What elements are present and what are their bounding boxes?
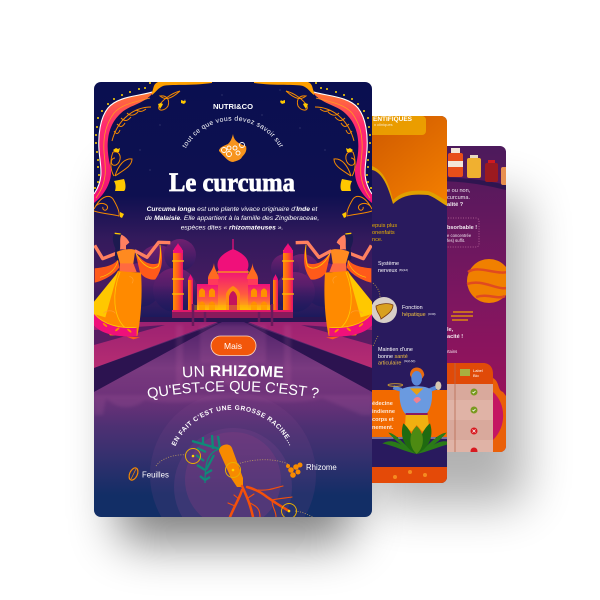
ground	[94, 317, 372, 392]
rhizome diagram	[128, 405, 336, 517]
text: joints: bonne santé	[378, 354, 408, 360]
intro text: Curcuma longa est une plante vivace originaire d'Inde et	[147, 206, 319, 213]
text: benefits intro	[372, 223, 397, 241]
intro text: de Malaisie. Elle appartient à la famille des Zingiberaceae,	[145, 215, 319, 222]
illustration: right dancer	[296, 233, 372, 339]
arches	[226, 286, 240, 310]
panel: middle card: ENTIFIQUES	[373, 116, 413, 123]
icon: planet	[466, 259, 506, 303]
text: nervous system: (8)(12)	[399, 268, 408, 272]
orange band	[372, 390, 447, 437]
table: Label	[473, 368, 483, 373]
text: nervous system: Système	[378, 261, 399, 267]
panel: front card	[94, 82, 372, 517]
icon: turmeric drop	[219, 134, 246, 162]
button: Mais	[211, 336, 256, 356]
intro text: espèces dites « rhizomateuses ».	[181, 224, 283, 232]
panel: middle card: x cliniques	[374, 122, 393, 127]
icon: liver	[371, 297, 397, 323]
panel: middle card: édecine	[372, 401, 393, 407]
illustration: Taj Mahal	[172, 239, 294, 318]
icon: rhizome	[286, 462, 302, 478]
text: joints: (G)(U)(I)	[404, 359, 415, 363]
text fragments: fes) suffit.	[447, 238, 465, 243]
text fragments: bsorbable !	[447, 225, 477, 231]
panel: middle card: indienne	[372, 409, 395, 415]
domes	[218, 249, 248, 271]
text: benefits intro: epuis plus	[372, 223, 397, 229]
text fragments: alité ?	[447, 202, 464, 208]
text: benefits intro: onenfaits	[372, 230, 395, 236]
icon: leaf	[127, 467, 140, 481]
text: liver function: hépatique	[402, 312, 426, 318]
shelf with jars	[447, 148, 506, 190]
text: joints: Maintien d'une	[378, 347, 413, 353]
table	[447, 363, 493, 454]
leaves	[192, 435, 220, 483]
heading: UN RHIZOME	[183, 365, 283, 378]
ornamental frame left	[94, 82, 212, 218]
illustration: left dancer	[94, 233, 170, 339]
monument reflection	[94, 325, 372, 415]
panel: middle card	[372, 116, 447, 483]
minarets	[173, 250, 293, 310]
text fragments: curcuma.	[447, 195, 470, 201]
posts	[193, 304, 272, 326]
arc subtitle: tout ce que vous devez savoir sur	[182, 116, 284, 148]
text: liver function: (C30)	[428, 312, 436, 316]
ornamental frame right	[254, 82, 372, 218]
heading	[148, 365, 319, 400]
text: benefits intro: nce.	[372, 237, 383, 243]
stars	[140, 90, 326, 170]
dotted lines	[156, 455, 318, 520]
text: liver function: Fonction	[402, 305, 423, 311]
text: nervous system	[378, 261, 408, 272]
text fragments: acité !	[447, 334, 463, 340]
text fragments: e concentrée	[447, 233, 472, 238]
text fragments: e ou non,	[447, 188, 471, 194]
text: joints	[378, 347, 415, 366]
markers	[186, 448, 296, 518]
main building	[197, 284, 270, 310]
text: liver function	[402, 305, 436, 318]
text: joints: articulaire	[378, 360, 401, 366]
heading: QU'EST-CE QUE C'EST ?	[148, 380, 319, 400]
text fragments	[447, 188, 477, 354]
title: Le curcuma	[169, 168, 295, 197]
intro text	[145, 206, 319, 232]
table: Bio	[473, 373, 480, 378]
text fragments: rtains	[447, 349, 457, 354]
root	[219, 444, 292, 517]
text: nervous system: nerveux	[378, 268, 397, 274]
panel: middle card: nement.	[372, 425, 394, 431]
button: Mais: Mais	[224, 341, 242, 351]
panel: middle card: corps et	[372, 417, 394, 423]
label: Rhizome: Rhizome	[306, 463, 337, 472]
logo: NUTRI&CO	[213, 102, 253, 111]
background shadow	[118, 175, 525, 543]
illustration: blue deity on lotus	[382, 367, 452, 454]
wave header edge	[372, 166, 447, 206]
text fragments: le,	[447, 327, 454, 333]
panel: back card	[447, 146, 506, 452]
label: Feuilles: Feuilles	[142, 470, 169, 480]
arc caption: EN FAIT C'EST UNE GROSSE RACINE...	[171, 405, 290, 446]
clouds behind monument	[94, 239, 372, 318]
